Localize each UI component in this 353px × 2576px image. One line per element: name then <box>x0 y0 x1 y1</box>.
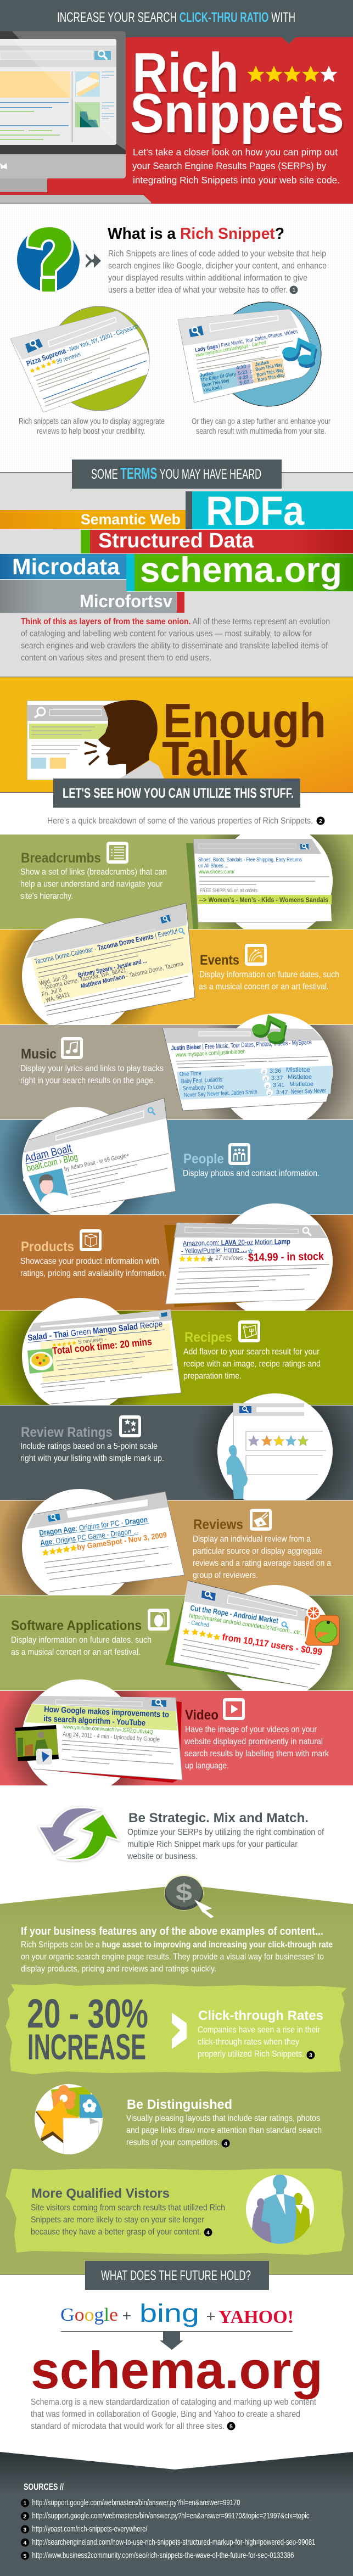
dotted background <box>0 204 353 473</box>
title: Rich Snippets <box>130 42 344 144</box>
term: Microfortsv: Microfortsv <box>80 591 172 611</box>
logos: Google + Bing + Yahoo <box>60 2299 294 2327</box>
card <box>186 839 332 929</box>
card: Mistletoe <box>288 1074 312 1080</box>
heading: SOURCES // <box>24 2482 64 2492</box>
heading: Click-through Rates <box>198 2008 323 2023</box>
card: by Adam Boalt - in 69 Google+ <box>64 1152 130 1173</box>
icon: mouse <box>148 1609 170 1631</box>
card: Dragon Age: Origins for PC - Dragon <box>38 1515 148 1537</box>
badge 3: 3 <box>309 2052 312 2059</box>
description: preparation time. <box>183 1371 242 1381</box>
description: as a musical concert or an art festival. <box>11 1648 141 1657</box>
description: Display photos and contact information. <box>183 1169 320 1178</box>
description: up language. <box>185 1761 229 1771</box>
badge 3 <box>306 2051 315 2059</box>
text: schema explanation: that was formed in collaboration of Google, Bing and Yahoo to create a shared <box>31 2410 300 2419</box>
explanation text <box>21 617 330 663</box>
description: Display information on future dates, such <box>11 1636 152 1645</box>
illustration: multimedia snippet: Born This Way <box>256 367 284 378</box>
icon: stars <box>119 1415 141 1437</box>
source list: http://support.google.com/webmasters/bin/answer.py?hl=en&answer=99170 <box>32 2498 240 2507</box>
title: Enough Talk: Talk <box>162 731 248 786</box>
card: www.youtube.com/watch?v=J5RZOU6vk4Q <box>63 1724 153 1735</box>
card: Never Say Never <box>291 1088 326 1095</box>
card: Total cook time: 20 mins <box>52 1336 153 1357</box>
card: Tacoma Dome Calendar - Tacoma Dome Events | Eventful <box>33 927 178 966</box>
explanation text: content on various sites and present them to end users. <box>21 653 211 663</box>
card: Baby Feat. Ludacris <box>181 1077 222 1085</box>
card: https://market.android.com/details?id=com...ctr... <box>189 1612 305 1637</box>
heading bar: future <box>85 2261 269 2290</box>
heading bar <box>72 460 282 489</box>
explanation text: Think of this as layers of from the same onion. All of these terms represent an evolution <box>21 617 330 626</box>
badge 4: 4 <box>224 2141 227 2147</box>
text: schema explanation <box>31 2398 316 2431</box>
description <box>20 1064 164 1085</box>
term: RDFa <box>186 488 353 534</box>
description: search results by labelling them with mark <box>184 1749 329 1759</box>
text: schema explanation: Schema.org is a new standardardization of cataloging and marking up web content <box>31 2398 316 2407</box>
source list: 2 <box>23 2513 26 2520</box>
card <box>23 1098 176 1212</box>
panel: enough talk <box>0 676 353 826</box>
card <box>23 1492 184 1592</box>
card: Adam Boalt <box>24 1142 73 1165</box>
card: Salad - Thai Green Mango Salad Recipe <box>27 1319 163 1343</box>
text <box>126 2114 322 2147</box>
title: schema.org: schema.org <box>31 2341 323 2400</box>
card: FREE SHIPPING on all orders. <box>200 888 259 893</box>
icon: note <box>61 1037 83 1059</box>
text: and page links draw more attention than standard search <box>126 2126 322 2135</box>
card: www.shoes.com/ <box>198 869 234 875</box>
description: group of reviewers. <box>193 1571 258 1580</box>
intro line: 2 <box>319 818 322 825</box>
text: Snippets are more likely to stay on your site longer <box>31 2215 205 2225</box>
illustration: review snippet <box>10 306 149 412</box>
description: Include ratings based on a 5-point scale <box>20 1442 158 1451</box>
logo: Google: Google <box>60 2305 118 2325</box>
panel: review ratings <box>0 1393 353 1500</box>
illustration: multimedia snippet: The Edge Of Glory <box>200 371 236 383</box>
card: ♫ <box>265 1083 269 1089</box>
term: Structured Data <box>81 529 353 553</box>
card: Never Say Never feat. Jaden Smith <box>184 1089 257 1099</box>
illustration: desktop monitor <box>0 31 151 204</box>
panel: terms <box>0 460 353 677</box>
card: by GameSpot - Nov 3, 2009 <box>76 1530 167 1552</box>
card: ♫ <box>262 1069 266 1074</box>
icon: list <box>107 842 128 864</box>
top banner <box>0 0 353 44</box>
illustration: multimedia snippet <box>178 302 321 406</box>
stat: 20-30%: 20 - 30% <box>27 1991 148 2036</box>
source list: 5 <box>23 2553 26 2560</box>
badge 4: 4 <box>206 2230 210 2236</box>
icon: people <box>246 2174 314 2245</box>
intro text <box>132 147 340 186</box>
description <box>183 1347 321 1381</box>
term: RDFa: RDFa <box>206 488 305 534</box>
badge 4 <box>222 2139 229 2148</box>
card: on All Shoes ... <box>198 863 228 869</box>
description: website displayed prominently in natural <box>184 1737 323 1746</box>
captions: search result with multimedia from your site. <box>196 427 326 436</box>
card: 3:47 <box>276 1089 288 1096</box>
card: Britney Spears - Jessie and ... <box>77 957 148 979</box>
heading: People <box>183 1151 224 1167</box>
card <box>15 1696 182 1783</box>
card <box>26 903 195 1024</box>
panel: reviews <box>0 1489 353 1595</box>
description: reviews and a rating average based on a <box>193 1559 331 1568</box>
card: www.myspace.com/justinbieber <box>175 1048 245 1059</box>
source list: 1 <box>23 2500 26 2507</box>
text: Visually pleasing layouts that include star ratings, photos <box>126 2114 320 2123</box>
card: Justin Bieber | Free Music, Tour Dates, Photos, Videos - MySpace <box>171 1038 312 1052</box>
term: Microdata: Microdata <box>12 554 120 579</box>
card: Aug 24, 2011 - 4 min - Uploaded by Google <box>63 1731 160 1743</box>
text <box>198 2025 321 2059</box>
illustration: multimedia snippet: 4:10 ♫ <box>236 362 251 371</box>
description: Display an individual review from a <box>193 1535 311 1544</box>
description: website or business. <box>127 1852 198 1861</box>
definition text: Rich Snippets are lines of code added to your website that help <box>108 249 326 259</box>
icon: star and flowers <box>35 2084 103 2158</box>
definition text: search engines like Google, dicipher your content, and enhance <box>108 261 327 271</box>
panel: music <box>0 1013 353 1119</box>
card: Somebody To Love <box>183 1084 224 1092</box>
icon: green music note <box>252 1015 287 1044</box>
illustration: multimedia snippet: 4:20 ♫ <box>238 373 254 381</box>
term: Semantic Web <box>0 510 186 529</box>
card: - Cached <box>188 1619 210 1628</box>
description: recipe with an image, recipe ratings and <box>183 1359 321 1369</box>
badge 5: 5 <box>229 2423 233 2430</box>
icon: chevron <box>172 2013 187 2049</box>
panel: more qualified visitors <box>5 2169 345 2255</box>
stat: 20-30%: INCREASE <box>27 2026 146 2067</box>
heading: What is a Rich Snippet? <box>108 225 284 243</box>
illustration: review snippet: 39 reviews <box>55 351 82 366</box>
icon: coin and cursor <box>164 1874 214 1918</box>
description: Optimize your SERPs by utilizing the right combination of <box>127 1828 324 1837</box>
title: Rich Snippets: Rich <box>132 42 239 104</box>
text: schema explanation: standard of microdata that would work for all three sites. <box>31 2422 225 2431</box>
description <box>20 867 167 901</box>
panel: click-through rates <box>5 1984 347 2074</box>
card: Wed, Jun 29 <box>39 974 68 987</box>
icon: double chevron <box>86 254 101 268</box>
description: Have the image of your videos on your <box>185 1725 317 1734</box>
banner <box>53 779 300 808</box>
term: Semantic Web: Semantic Web <box>81 511 181 528</box>
heading: Music <box>21 1046 57 1062</box>
card: Shoes, Boots, Sandals - Free Shipping, Easy Returns <box>198 857 302 863</box>
heading: Be Strategic. Mix and Match. <box>128 1811 309 1825</box>
description: Show a set of links (breadcrumbs) that can <box>20 867 167 877</box>
term: schema.org: schema.org <box>140 550 342 590</box>
definition text <box>108 249 327 295</box>
badge 4 <box>204 2228 212 2237</box>
icon: game app <box>305 1605 339 1645</box>
text <box>31 2203 225 2237</box>
term: Microfortsv <box>0 580 184 613</box>
heading: Recipes <box>184 1330 232 1345</box>
description: particular source or display aggregate <box>193 1547 322 1556</box>
stat: 20-30% <box>27 1991 148 2067</box>
heading: Video <box>185 1707 218 1723</box>
panel: what is a rich snippet <box>0 204 353 473</box>
yellow background <box>0 677 353 792</box>
top banner: INCREASE YOUR SEARCH CLICK-THRU RATIO WITH <box>57 10 295 25</box>
intro text: display products, pricing and reviews and ratings quickly. <box>21 1964 216 1974</box>
illustration: browser with stars <box>226 1403 326 1499</box>
heading: Products <box>21 1239 74 1255</box>
definition text: users a better idea of what your website has to offer. <box>108 285 288 295</box>
illustration: talking head <box>85 700 164 779</box>
text: because they have a better grasp of your content. <box>31 2227 201 2237</box>
card: 5 reviews - <box>78 1336 107 1346</box>
illustration: multimedia snippet: www.myspace.com/ladygaga - Cached <box>195 340 266 359</box>
intro line: Here’s a quick breakdown of some of the various properties of Rich Snippets. <box>47 816 313 826</box>
panel: benefits <box>0 1874 353 2275</box>
heading bar: SOME TERMS YOU MAY HAVE HEARD <box>91 465 261 483</box>
card: 3:37 <box>271 1075 283 1082</box>
arrow to schema.org <box>61 2331 293 2350</box>
green background <box>0 1885 353 2275</box>
card: How Google makes improvements to <box>44 1705 169 1720</box>
description: Add flavor to your search result for your <box>183 1347 320 1357</box>
text: results of your competitors. <box>126 2138 220 2147</box>
card: 3:41 <box>273 1082 284 1089</box>
description: right with your listing with simple mark up. <box>20 1454 164 1463</box>
icon: play <box>223 1698 245 1720</box>
text: properly utilized Rich Snippets. <box>198 2049 304 2059</box>
panel: software applications <box>0 1580 353 1690</box>
icon: swap arrows <box>38 1807 119 1860</box>
card: Age: Origins PC Game - Dragon ... <box>40 1526 139 1547</box>
card: , WA, 98421 <box>43 992 70 1005</box>
illustration: multimedia snippet: Born This Way <box>201 378 229 388</box>
description: right in your search results on the page. <box>20 1076 155 1085</box>
intro text: Let’s take a closer look on how you can pimp out <box>133 147 338 158</box>
heading: Be Distinguished <box>127 2097 232 2112</box>
heading: More Qualified Vistors <box>31 2186 170 2201</box>
source list <box>21 2498 315 2560</box>
card: Cut the Rope - Android Market <box>190 1603 279 1625</box>
text: Site visitors coming from search results that utilized Rich <box>31 2203 225 2213</box>
intro heading: If your business features any of the above examples of content... <box>21 1925 323 1937</box>
card: 3:36 <box>270 1068 281 1074</box>
card: Amazon.com: LAVA 20-oz Motion Lamp <box>183 1237 290 1247</box>
icon: fireworks <box>245 944 267 966</box>
heading: Breadcrumbs <box>21 850 101 866</box>
illustration: multimedia snippet: You And I <box>203 384 222 393</box>
text: Companies have seen a rise in their <box>198 2025 321 2035</box>
logo: Bing: bing <box>139 2299 199 2327</box>
panel: video <box>0 1679 353 1785</box>
heading: Reviews <box>193 1517 243 1532</box>
source list: 4 <box>23 2540 26 2546</box>
panel: breadcrumbs <box>0 835 353 929</box>
title: Enough Talk <box>162 693 326 786</box>
card <box>164 1223 333 1307</box>
icon: five stars <box>247 66 338 82</box>
illustration: multimedia snippet: | Free Music, Tour Dates, Photos, Videos <box>218 329 298 349</box>
panel: products <box>0 1203 353 1311</box>
card: its search algorithm - YouTube <box>43 1714 145 1728</box>
intro text: integrating Rich Snippets into your web site code. <box>133 175 340 186</box>
description <box>20 1442 164 1463</box>
captions: reviews to help boost your credibility. <box>37 427 145 436</box>
icon: people <box>228 1143 250 1165</box>
description <box>199 970 339 992</box>
card: ♫ <box>267 1090 271 1096</box>
card <box>163 1028 333 1111</box>
card: --> Women’s - Men’s - Kids - Womens Sandals <box>199 896 328 904</box>
illustration: multimedia snippet: 5:07 ♫ <box>239 378 255 386</box>
card: 17 reviews - <box>215 1254 246 1262</box>
card: Fri, Jul 8 <box>41 987 63 998</box>
card: ♫ <box>264 1076 267 1082</box>
definition text: your displayed results within additional information to give <box>108 273 307 283</box>
icon: question mark <box>17 226 80 293</box>
illustration: multimedia snippet: Lady Gaga <box>195 343 218 354</box>
description: Showcase your product information with <box>20 1257 159 1266</box>
illustration: multimedia snippet: Born This Way <box>255 362 283 372</box>
plus <box>207 2312 215 2320</box>
panel: people <box>0 1098 353 1214</box>
logo: Yahoo: YAHOO! <box>218 2307 294 2327</box>
card: One Time <box>180 1070 201 1078</box>
card: Mistletoe <box>289 1081 313 1088</box>
intro text: your Search Engine Results Pages (SERPs) by <box>132 160 326 171</box>
panel: be distinguished <box>35 2084 322 2158</box>
description: as a musical concert or an art festival. <box>199 982 329 992</box>
description <box>20 1257 166 1278</box>
badge 5 <box>227 2422 235 2430</box>
plus <box>123 2312 131 2320</box>
description: ratings, pricing and availability information. <box>20 1269 166 1278</box>
icon: box <box>80 1229 102 1251</box>
icon: note with star <box>250 1509 272 1531</box>
heading: Events <box>200 953 239 968</box>
illustration: review snippet: - New York, NY, 10001 - Citysearch <box>65 322 139 354</box>
source list: 3 <box>23 2527 26 2533</box>
heading: Software Applications <box>11 1618 142 1633</box>
description <box>127 1828 324 1861</box>
card: - Tacoma Dome, Tacoma, WA, 98421 <box>41 967 127 992</box>
intro text <box>21 1940 333 1974</box>
badge 1: 1 <box>292 287 296 294</box>
card: boalt.com › Blog <box>26 1152 79 1174</box>
captions <box>19 417 330 436</box>
card <box>23 1309 181 1404</box>
panel: mix and match <box>0 1785 353 1867</box>
captions: Rich snippets can allow you to display aggregrate <box>19 417 165 426</box>
description: multiple Rich Snippet mark ups for your particular <box>127 1840 298 1849</box>
card: - Yellow/Purple: Home .... <box>181 1245 248 1255</box>
illustration: browser <box>27 701 132 780</box>
panel: sources <box>0 2452 353 2576</box>
panel: events <box>0 903 353 1024</box>
card: $14.99 - in stock <box>248 1251 324 1264</box>
red hero background <box>0 37 353 204</box>
heading bar: future: WHAT DOES THE FUTURE HOLD? <box>101 2268 251 2283</box>
heading: Review Ratings <box>21 1425 113 1440</box>
illustration: multimedia snippet: Judas <box>199 370 214 378</box>
illustration: multimedia snippet: 5:21 ♫ <box>238 368 253 376</box>
illustration: multimedia snippet: Judas <box>254 359 270 367</box>
source list: http://yoast.com/rich-snippets-everywhere/ <box>32 2524 148 2534</box>
card: Mistletoe <box>286 1067 310 1073</box>
card: from 10,117 users - $0.99 <box>221 1632 323 1657</box>
badge 1 <box>290 285 298 294</box>
term: Structured Data: Structured Data <box>98 529 254 552</box>
card <box>165 1581 333 1687</box>
card: Matthew Morrison - Tacoma Dome, Tacoma <box>80 960 184 990</box>
description <box>11 1636 152 1657</box>
description <box>193 1535 331 1580</box>
explanation text: of cataloging and labelling web content for various uses — most suitably, to allow for <box>21 629 312 639</box>
description: site's hierarchy. <box>20 892 73 901</box>
description: Display your lyrics and links to play tracks <box>20 1064 164 1073</box>
text: click-through rates when they <box>198 2037 299 2047</box>
illustration: multimedia snippet: Born This Way <box>257 372 285 383</box>
grey background <box>0 473 353 677</box>
description <box>184 1725 329 1771</box>
title: Enough Talk: Enough <box>163 693 326 748</box>
panel: hero header <box>0 0 353 204</box>
icon: recipe <box>238 1320 260 1342</box>
description: help a user understand and navigate your <box>20 880 163 889</box>
panel: recipes <box>0 1298 353 1405</box>
icon: coin and cursor: $ <box>176 1879 192 1906</box>
illustration: review snippet: Pizza Suprema <box>25 346 67 368</box>
